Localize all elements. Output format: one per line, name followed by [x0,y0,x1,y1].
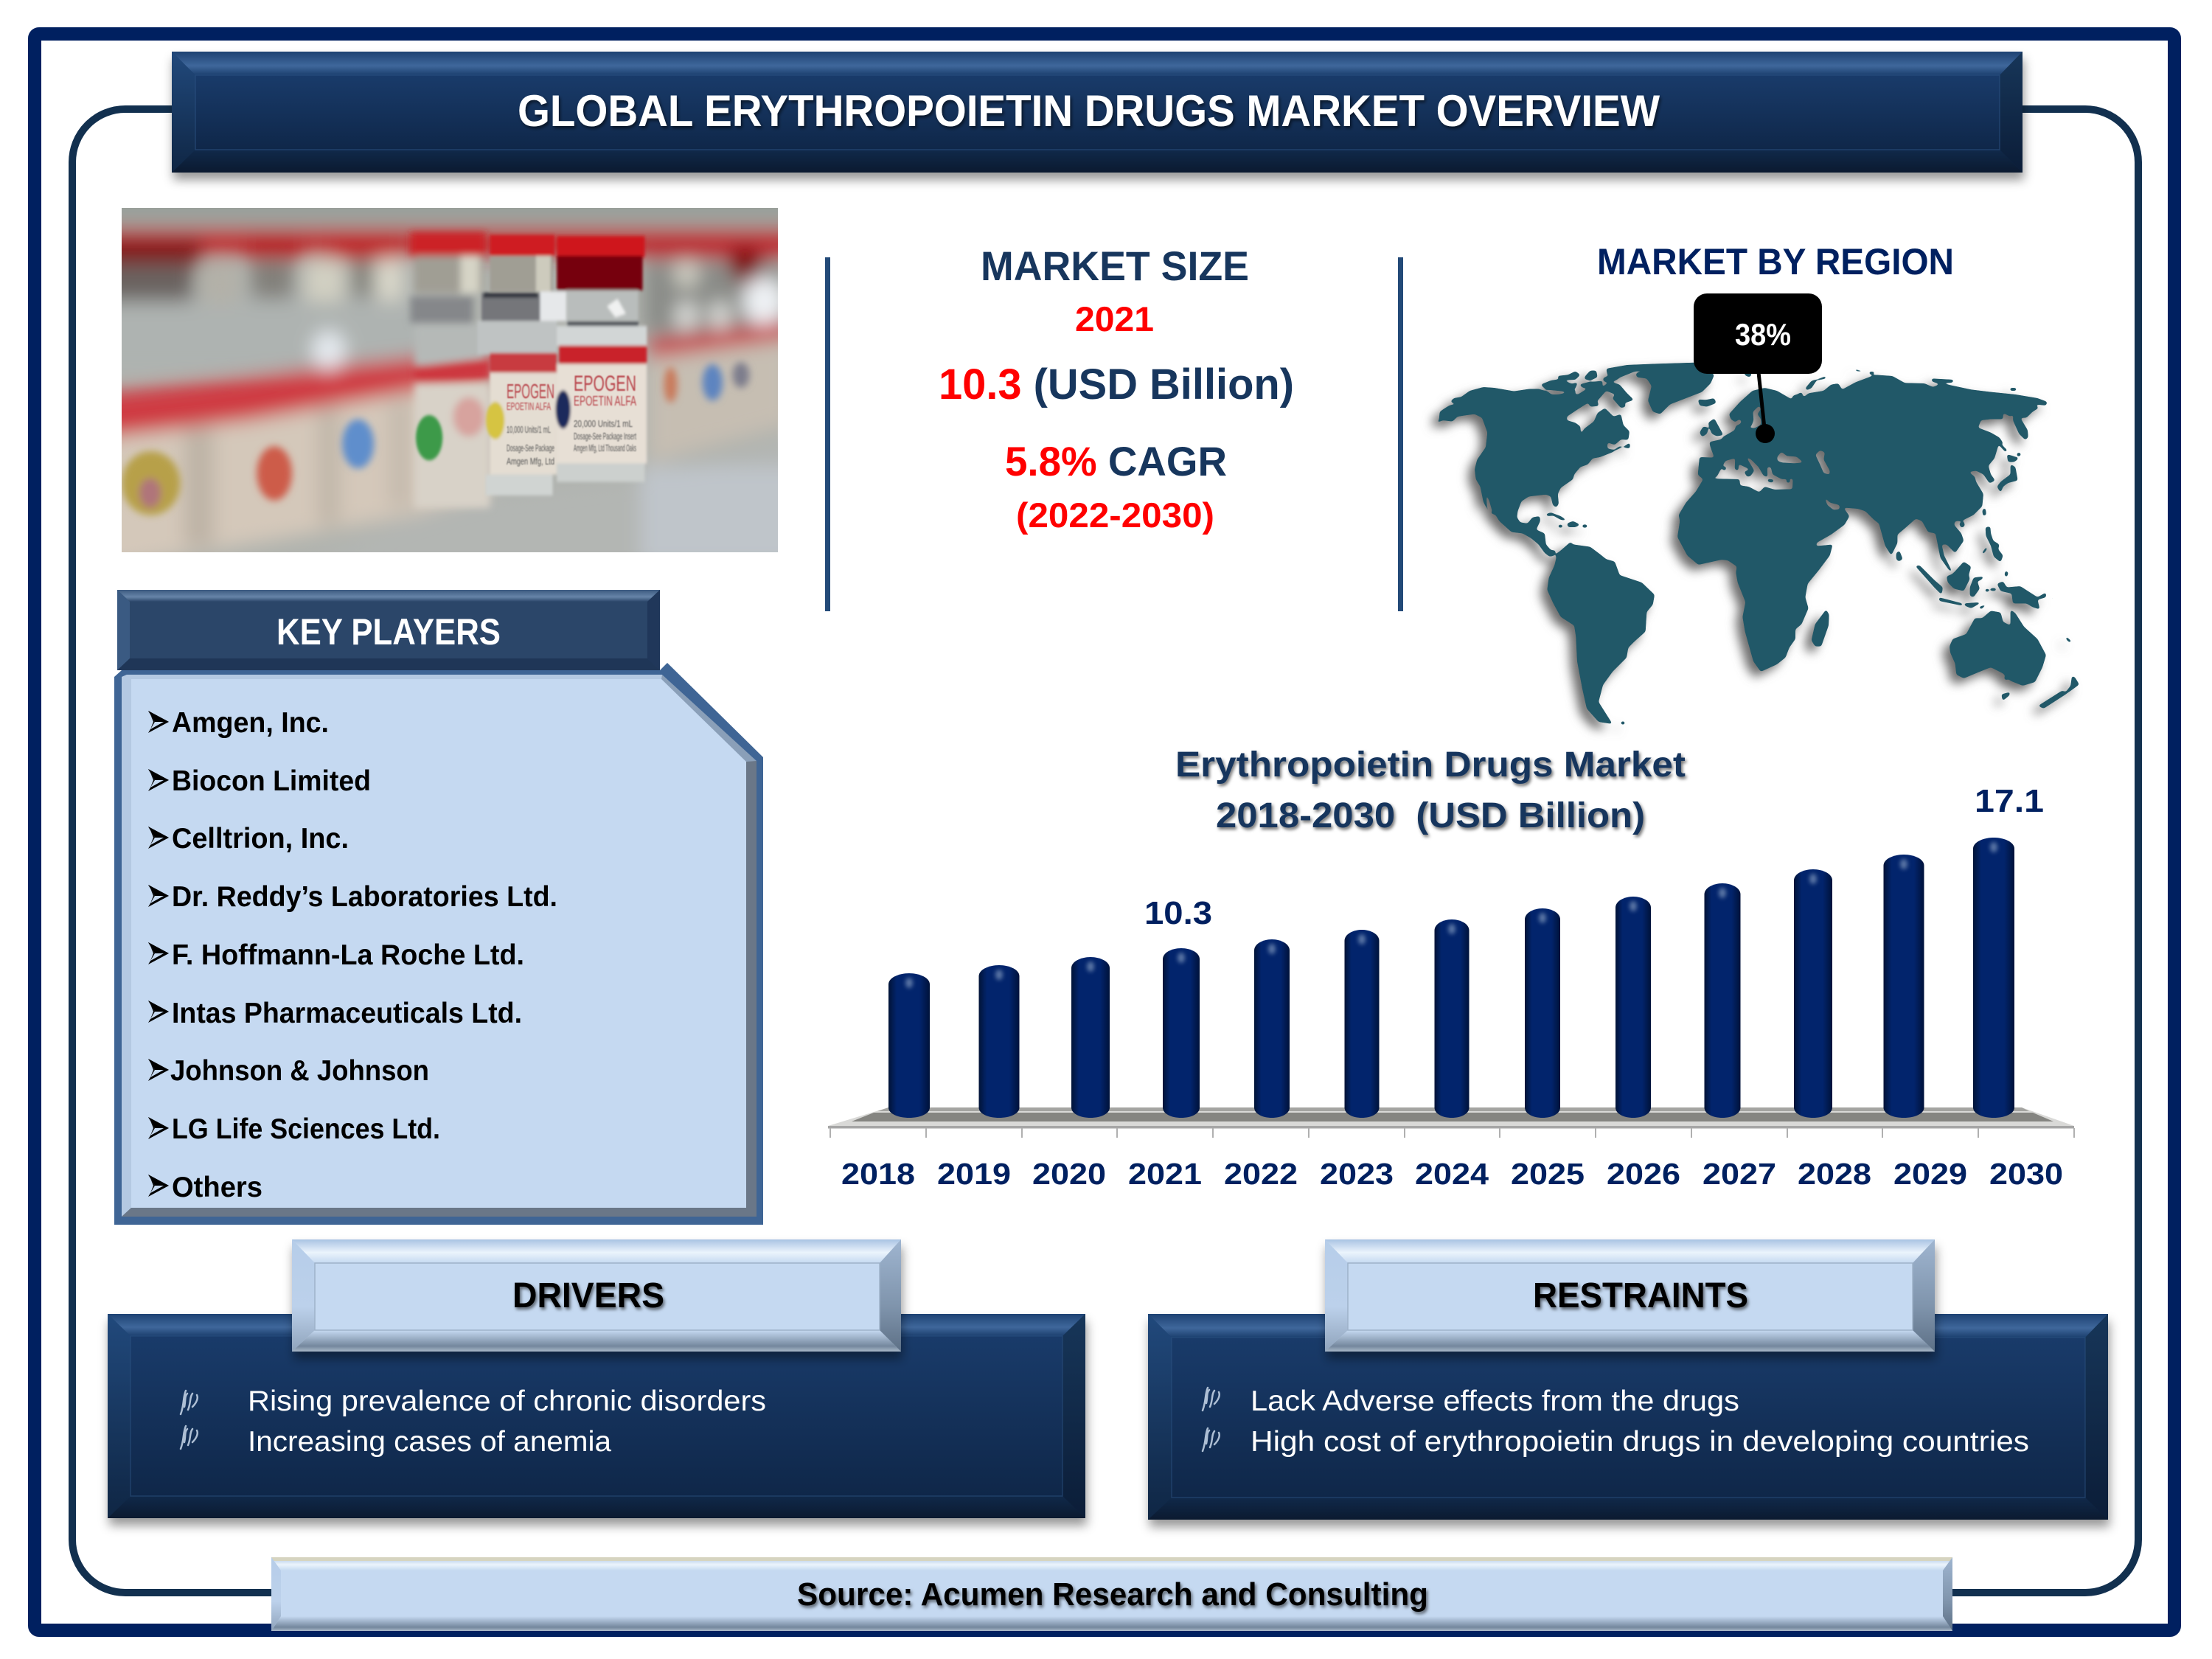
CAGR value: 5.8% CAGR [1005,438,1227,484]
photo label text: EPOGEN [507,380,554,403]
map callout: 38%: 38% [1735,317,1791,352]
title banner [172,52,2023,173]
player list items: F. Hoffmann-La Roche Ltd. [172,939,524,971]
photo label text: EPOGEN [574,372,636,396]
source bar: Source: Acumen Research and Consulting [797,1576,1428,1613]
value label 10.3: 10.3 [1144,895,1212,931]
world map [1435,363,2079,725]
year axis labels: 2022 [1224,1157,1298,1191]
restraint items: Lack Adverse effects from the drugs [1251,1385,1739,1417]
divider left of region map [1398,257,1403,611]
player list items [170,707,557,1203]
driver items: Rising prevalence of chronic disorders [248,1385,766,1417]
panel: restraints [1148,1239,2108,1520]
market by region heading: MARKET BY REGION [1597,241,1954,282]
key players list panel [114,663,763,1225]
restraint items: High cost of erythropoietin drugs in developing countries [1251,1426,2029,1458]
oceania [1950,581,2079,709]
player list items: LG Life Sciences Ltd. [172,1113,440,1145]
drivers header: DRIVERS [512,1276,664,1315]
chart floor [828,1107,2074,1138]
year axis labels: 2027 [1703,1157,1776,1191]
player list items: Johnson & Johnson [170,1055,429,1087]
restraint bullets [1203,1388,1220,1451]
player list items: Celltrion, Inc. [172,823,349,855]
bar chart [828,783,2074,1191]
restraint items [1251,1385,2029,1458]
photo label text: 20,000 Units/1 mL [574,418,633,429]
photo label text: EPOETIN ALFA [574,394,636,408]
player list items: Biocon Limited [172,765,371,797]
bar highlights [905,842,1997,988]
restraints header: RESTRAINTS [1533,1276,1748,1315]
key players header [117,590,660,670]
player list items: Amgen, Inc. [172,707,329,739]
year axis labels: 2020 [1032,1157,1106,1191]
player list items: Intas Pharmaceuticals Ltd. [172,998,522,1029]
market size heading: MARKET SIZE [981,243,1249,289]
year axis labels: 2021 [1128,1157,1202,1191]
driver bullets [181,1391,198,1449]
photo label text: Dosage-See Package [507,442,554,453]
photo label text: EPOETIN ALFA [507,400,551,413]
americas and greenland [1435,363,1717,725]
photo label text: 10,000 Units/1 mL [507,424,551,435]
year axis labels: 2025 [1511,1157,1585,1191]
chart title [1175,745,1686,835]
divider left of market size [825,257,830,611]
photo label text [507,372,636,467]
restraints header [1325,1239,1935,1352]
east asia and pacific islands [1896,378,2021,610]
bars 2018 to 2030 [888,838,2014,1118]
forecast period: (2022-2030) [1016,495,1214,535]
chart title: Erythropoietin Drugs Market [1175,745,1686,785]
panel: drivers [108,1239,1085,1518]
driver items [248,1385,766,1458]
photo label text: Dosage-See Package Insert [574,431,636,442]
base year: 2021 [1075,299,1154,338]
photo label text: Amgen Mfg, Ltd [507,456,554,467]
photo: erythropoietin vials [122,208,778,552]
list arrow bullets [148,711,169,1197]
market size panel [939,243,1294,535]
year axis labels: 2023 [1320,1157,1394,1191]
drivers header [292,1239,901,1352]
player list items: Dr. Reddy’s Laboratories Ltd. [172,881,557,913]
year axis labels: 2026 [1607,1157,1680,1191]
year axis labels [841,1157,2063,1191]
front vial [557,236,644,257]
chart title: 2018-2030 (USD Billion) [1216,796,1645,835]
year axis labels: 2028 [1798,1157,1871,1191]
key players header: KEY PLAYERS [276,611,501,653]
year axis labels: 2019 [937,1157,1011,1191]
market value: 10.3 (USD Billion) [939,361,1294,408]
year axis labels: 2018 [841,1157,915,1191]
photo: erythropoietin vials: Amgen Mfg, Ltd Thousand Oaks [574,442,636,453]
driver items: Increasing cases of anemia [248,1426,611,1458]
second vial [490,235,554,256]
title text: GLOBAL ERYTHROPOIETIN DRUGS MARKET OVERVIEW [518,86,1660,136]
eurasia and africa [1677,369,2048,672]
value label 17.1: 17.1 [1975,783,2044,819]
source bar [271,1557,1952,1631]
year axis labels: 2030 [1989,1157,2063,1191]
player list items: Others [172,1172,262,1203]
map callout: 38% [1694,293,1822,443]
year axis labels: 2024 [1415,1157,1489,1191]
year axis labels: 2029 [1893,1157,1967,1191]
